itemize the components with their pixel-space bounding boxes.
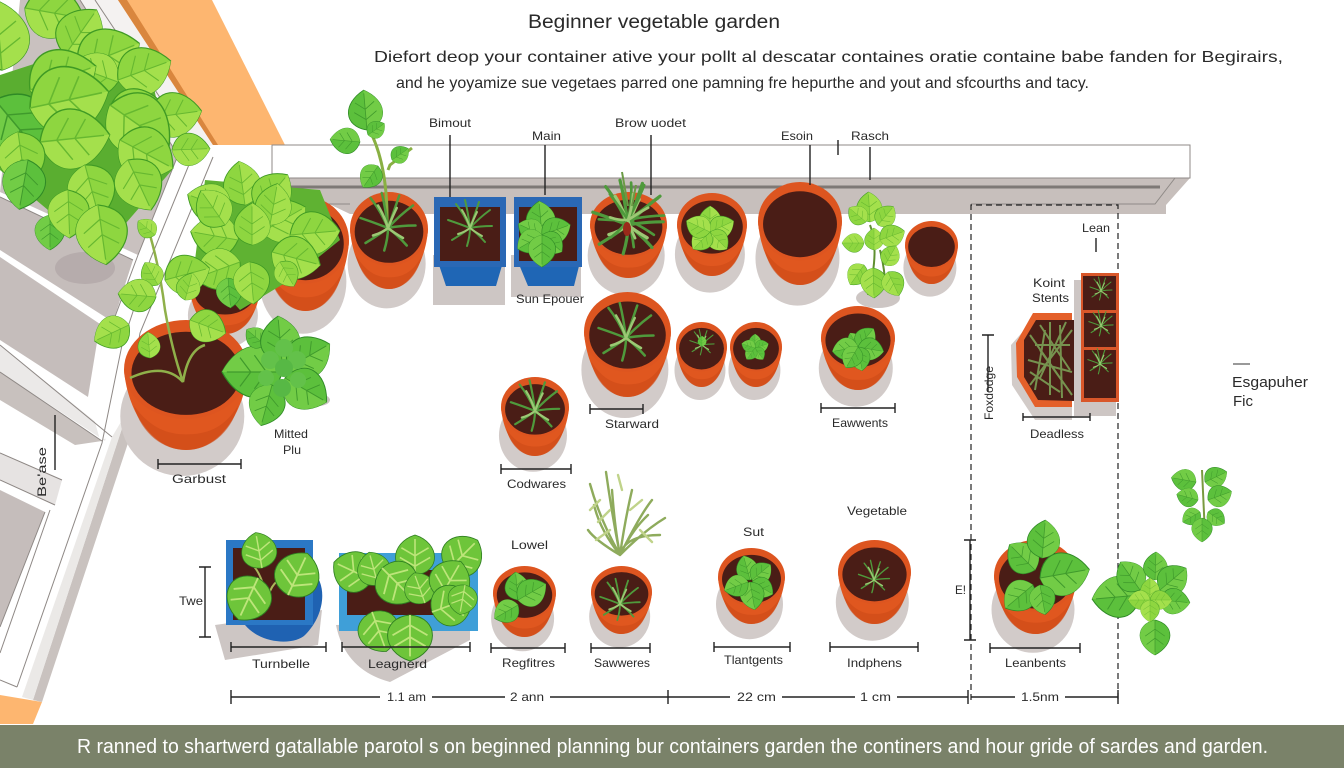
bottom labels: Vegetable <box>847 504 907 518</box>
bottom labels: Leanbents <box>1005 656 1066 670</box>
top labels <box>429 116 889 143</box>
bottom labels: Lowel <box>511 538 548 552</box>
dimension values <box>387 690 1059 704</box>
pot with feathery plant <box>588 172 674 295</box>
bottom labels: E! <box>955 583 966 597</box>
side note: Esgapuher <box>1232 375 1308 391</box>
plan labels: Starward <box>605 417 659 431</box>
right hexagonal planter <box>1011 313 1074 420</box>
plan labels: Lean <box>1082 221 1110 235</box>
plan labels: Mitted <box>274 427 308 441</box>
dimension values: 1.1 am <box>387 690 426 704</box>
bottom pot: vegetable <box>836 540 911 641</box>
intro text: Diefort deop your container ative your pollt al descatar containes oratie containe babe fanden for Begirairs, <box>374 49 1283 66</box>
blue planter B <box>511 197 582 297</box>
bottom long planter <box>325 526 492 682</box>
bottom labels: Tlantgents <box>724 653 783 667</box>
side note: Fic <box>1233 394 1253 410</box>
feathery plant above bottom pot <box>588 472 665 555</box>
footer band <box>0 725 1344 768</box>
bottom blue planter <box>215 529 328 660</box>
top labels: Esoin <box>781 129 813 143</box>
intro text <box>374 49 1283 92</box>
plan labels <box>35 221 1110 497</box>
bottom labels: Indphens <box>847 656 902 670</box>
footer band: R ranned to shartwerd gatallable parotol s on beginned planning bur containers garden the continers and hour gride of sardes and garden. <box>77 736 1268 758</box>
middle pot small 2 <box>728 322 782 400</box>
plan labels: Plu <box>283 443 301 457</box>
plan labels: Codwares <box>507 477 566 491</box>
middle pot small 1 <box>674 322 727 400</box>
dimension values: 1 cm <box>860 690 891 704</box>
top labels: Main <box>532 129 561 143</box>
plan labels: Stents <box>1032 291 1069 305</box>
plan labels: Eawwents <box>832 416 888 430</box>
wall ledge <box>272 145 1190 214</box>
plan labels: Koint <box>1033 276 1066 290</box>
dashed planning area <box>971 205 1118 700</box>
loose plant bottom right <box>1090 552 1195 655</box>
bottom labels: Sut <box>743 525 765 539</box>
top labels: Brow uodet <box>615 116 687 130</box>
bottom labels: Regfitres <box>502 656 555 670</box>
window frame structure <box>0 0 272 702</box>
orange floor corner <box>0 695 42 724</box>
top labels: Rasch <box>851 129 889 143</box>
plant: leafy bush <box>181 159 342 310</box>
bottom pot: leanbents <box>992 519 1093 653</box>
pot with succulent <box>675 193 747 293</box>
small empty pot <box>903 221 958 297</box>
dimension values: 2 ann <box>510 690 544 704</box>
big climbing plant top-left <box>0 0 211 284</box>
bottom pot: lowel <box>489 566 556 651</box>
plant: rosette <box>222 314 340 430</box>
plan labels: Garbust <box>172 472 227 486</box>
large empty pot <box>755 182 842 306</box>
pot: small left <box>188 262 260 348</box>
top labels: Bimout <box>429 116 472 130</box>
loose plant right <box>1170 463 1235 542</box>
plan labels: Deadless <box>1030 427 1084 441</box>
bottom labels: Leagnerd <box>368 657 427 671</box>
mid-left pot <box>499 377 569 472</box>
bottom pot: sut <box>716 548 785 639</box>
right tall divided planter <box>1074 273 1119 416</box>
pot: seedling on ledge <box>329 89 428 308</box>
dimension values: 22 cm <box>737 690 776 704</box>
bottom labels: Turnbelle <box>252 657 310 671</box>
side note <box>1232 364 1308 410</box>
plan labels: Foxdodge <box>982 366 996 420</box>
bottom labels: Twe <box>179 594 203 608</box>
plant: vine beside pots <box>842 191 909 308</box>
pot: large front left <box>120 320 248 476</box>
pot: back left <box>259 197 349 334</box>
title: Beginner vegetable garden <box>528 12 780 33</box>
middle pot: tall plant <box>581 292 671 418</box>
plan labels: Sun Epouer <box>516 292 584 306</box>
leader lines and dimension marks <box>55 135 1118 704</box>
bottom labels <box>179 504 1066 671</box>
plant: vine in large pot <box>88 214 231 382</box>
plan labels: Be'ase <box>35 447 49 497</box>
intro text: and he yoyamize sue vegetaes parred one pamning fre hepurthe and yout and sfcourths and tacy. <box>396 75 1089 92</box>
orange roof band <box>118 0 285 145</box>
bottom labels: Sawweres <box>594 656 650 670</box>
bottom pot: sawweres <box>589 566 652 648</box>
blue planter A <box>433 197 506 305</box>
middle pot with leafy plant <box>819 306 895 407</box>
dimension values: 1.5nm <box>1021 690 1059 704</box>
